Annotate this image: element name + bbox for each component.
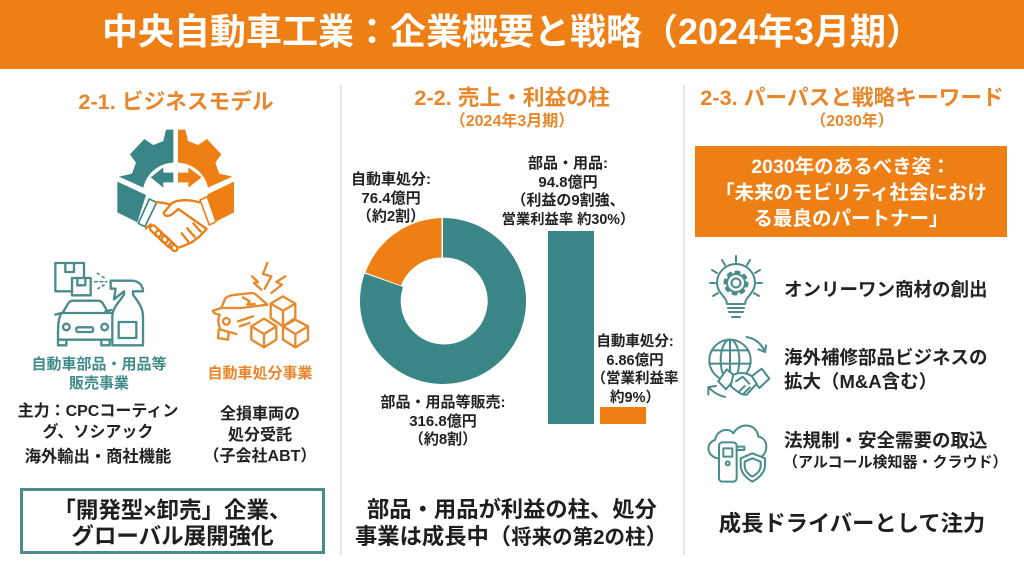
text: parts business detail: 海外輸出・商社機能	[25, 448, 171, 466]
text: parts business detail: 主力：CPCコーティン	[18, 403, 178, 420]
label: parts sales business: 販売事業	[69, 375, 129, 392]
bar: disposal profit	[600, 407, 646, 424]
title banner: 中央自動車工業：企業概要と戦略（2024年3月期）	[102, 11, 922, 52]
boxes	[55, 263, 91, 295]
label: parts profit	[502, 155, 634, 228]
subheading: fiscal period: （2024年3月期）	[450, 113, 574, 130]
label: disposal sales	[351, 171, 431, 225]
segment: parts sales	[360, 218, 526, 384]
teal half of gear	[117, 130, 173, 222]
text: overseas business: 拡大（M&A含む）	[784, 371, 937, 392]
heading: business model: 2-1. ビジネスモデル	[78, 89, 274, 114]
label: parts profit: （利益の9割強、	[511, 192, 625, 209]
heading: sales and profit: 2-2. 売上・利益の柱	[414, 85, 610, 110]
label: parts profit: 部品・用品:	[528, 155, 608, 172]
label: parts profit: 94.8億円	[538, 174, 598, 191]
car	[213, 293, 267, 340]
icon: light bulb with gear	[709, 255, 763, 318]
text: overseas business	[784, 347, 988, 392]
icon: globe and handshake	[707, 336, 770, 398]
title banner	[0, 0, 1024, 69]
text: disposal business detail: 処分受託	[228, 427, 292, 444]
label: disposal sales: 自動車処分:	[351, 171, 431, 188]
heading: purpose and keywords: 2-3. パーパスと戦略キーワード	[700, 85, 1004, 110]
spray bottle	[111, 281, 143, 345]
label: disposal business: 自動車処分事業	[207, 365, 312, 382]
bar: parts profit	[548, 231, 594, 424]
label: disposal profit: 6.86億円	[606, 352, 664, 368]
text: disposal business detail: （子会社ABT）	[204, 448, 316, 465]
handshake	[146, 200, 207, 252]
label: parts sales business	[31, 356, 166, 392]
text: regulation and safety demand: 法規制・安全需要の取込	[784, 430, 988, 451]
donut chart	[360, 218, 526, 384]
cuffs	[138, 199, 157, 227]
icon: crashed car and cubes	[212, 262, 310, 348]
segment: disposal	[366, 218, 442, 286]
callout: 2030 vision: 2030年のあるべき姿：	[751, 156, 951, 178]
text: parts business detail: グ、ソシアック	[43, 424, 153, 441]
label: disposal profit: 約9%）	[610, 390, 660, 406]
text: overseas business: 海外補修部品ビジネスの	[784, 347, 988, 368]
takeaway: growth driver: 成長ドライバーとして注力	[719, 511, 985, 536]
label: parts sales: （約8割）	[409, 431, 477, 448]
impact bolts	[252, 263, 285, 293]
icon: car parts and spray	[54, 262, 144, 346]
label: parts sales: 316.8億円	[409, 412, 477, 430]
callout: 2030 vision: 「未来のモビリティ社会におけ	[715, 182, 987, 204]
subheading: 2030: （2030年）	[810, 113, 894, 130]
text: parts business detail	[18, 402, 178, 466]
label: parts sales: 部品・用品等販売:	[380, 394, 506, 411]
callout: development x wholesale: 「開発型×卸売」企業、	[53, 498, 292, 523]
takeaway: profit pillar: 部品・用品が利益の柱、処分	[367, 497, 657, 522]
icon: gear and handshake	[117, 130, 234, 252]
text: regulation and safety demand: （アルコール検知器・クラウド）	[783, 454, 1008, 471]
takeaway: profit pillar: 事業は成長中（将来の第2の柱）	[355, 524, 668, 549]
label: disposal profit: 自動車処分:	[596, 334, 674, 350]
spray mist	[95, 273, 107, 289]
divider right	[683, 85, 685, 555]
label: disposal profit	[592, 333, 678, 406]
callout: development x wholesale: グローバル展開強化	[71, 524, 274, 549]
icon: cloud with detector and shield	[707, 424, 768, 483]
label: parts profit: 営業利益率 約30%）	[502, 212, 634, 228]
orange half of gear	[178, 130, 234, 222]
callout: 2030 vision	[695, 146, 1007, 237]
cubes	[251, 296, 308, 347]
divider left	[340, 85, 342, 555]
label: parts sales	[380, 394, 506, 448]
label: disposal sales: 76.4億円	[361, 190, 421, 206]
label: parts sales business: 自動車部品・用品等	[31, 356, 166, 373]
text: disposal business detail: 全損車両の	[220, 406, 300, 423]
takeaway: profit pillar	[355, 497, 668, 549]
label: disposal profit: （営業利益率	[592, 371, 678, 387]
text: only-one products: オンリーワン商材の創出	[784, 279, 988, 300]
callout: 2030 vision: る最良のパートナー」	[753, 208, 948, 230]
text: regulation and safety demand	[783, 430, 1008, 471]
text: disposal business detail	[204, 405, 316, 465]
car	[55, 301, 111, 345]
label: disposal sales: （約2割）	[357, 208, 425, 225]
callout: development x wholesale	[20, 488, 325, 554]
